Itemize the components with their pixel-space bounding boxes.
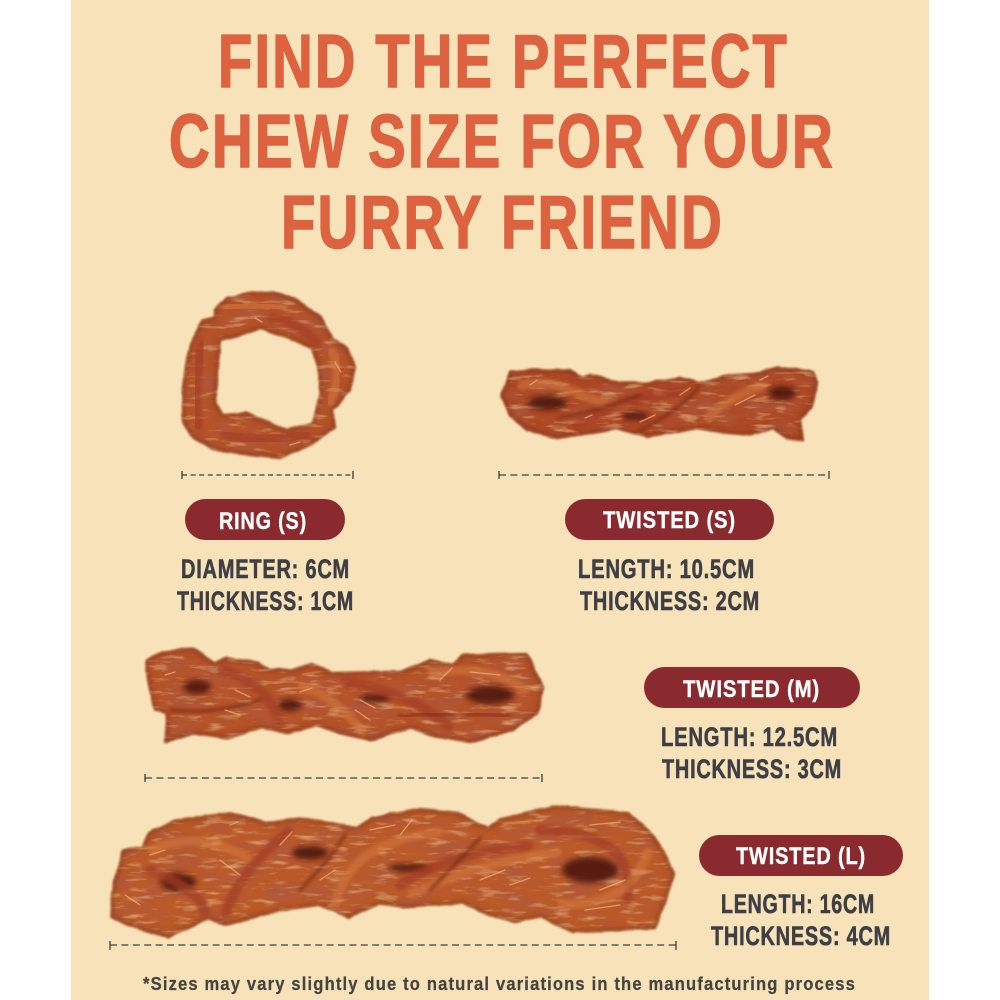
twisted small specs: LENGTH: 10.5CM — [578, 554, 755, 584]
ring specs — [177, 554, 354, 616]
twisted large label pill — [699, 835, 903, 876]
twisted medium specs: THICKNESS: 3CM — [662, 754, 842, 784]
twisted large specs — [711, 889, 891, 951]
twisted large chew image — [111, 806, 674, 937]
twisted small label pill: TWISTED (S) — [603, 507, 736, 534]
title: FIND THE PERFECT — [218, 19, 789, 103]
twisted large specs: THICKNESS: 4CM — [711, 921, 891, 951]
twisted medium label pill: TWISTED (M) — [683, 676, 820, 703]
ring dimension line — [182, 471, 353, 479]
twisted small dimension line — [499, 471, 829, 479]
panel: twisted large — [110, 806, 903, 951]
ring label pill: RING (S) — [219, 508, 307, 535]
twisted medium dimension line — [145, 774, 542, 782]
twisted small label pill — [565, 499, 774, 540]
ring chew image — [183, 292, 355, 458]
panel: twisted medium — [145, 649, 860, 784]
ring specs: THICKNESS: 1CM — [177, 586, 354, 616]
twisted large dimension line — [110, 941, 676, 950]
twisted small specs: THICKNESS: 2CM — [580, 586, 760, 616]
panel: twisted small — [499, 367, 829, 616]
twisted small chew image — [502, 367, 817, 440]
title: FURRY FRIEND — [281, 180, 724, 264]
twisted medium chew image — [147, 649, 543, 742]
twisted medium label pill — [644, 667, 860, 708]
twisted medium specs: LENGTH: 12.5CM — [661, 722, 838, 752]
footnote: *Sizes may vary slightly due to natural variations in the manufacturing process — [143, 973, 856, 994]
ring label pill — [185, 499, 345, 540]
twisted large specs: LENGTH: 16CM — [721, 889, 875, 919]
title — [169, 19, 835, 264]
twisted small specs — [578, 554, 760, 616]
panel: ring small — [177, 292, 355, 616]
twisted medium specs — [661, 722, 842, 784]
ring specs: DIAMETER: 6CM — [181, 554, 350, 584]
twisted large label pill: TWISTED (L) — [736, 843, 866, 870]
